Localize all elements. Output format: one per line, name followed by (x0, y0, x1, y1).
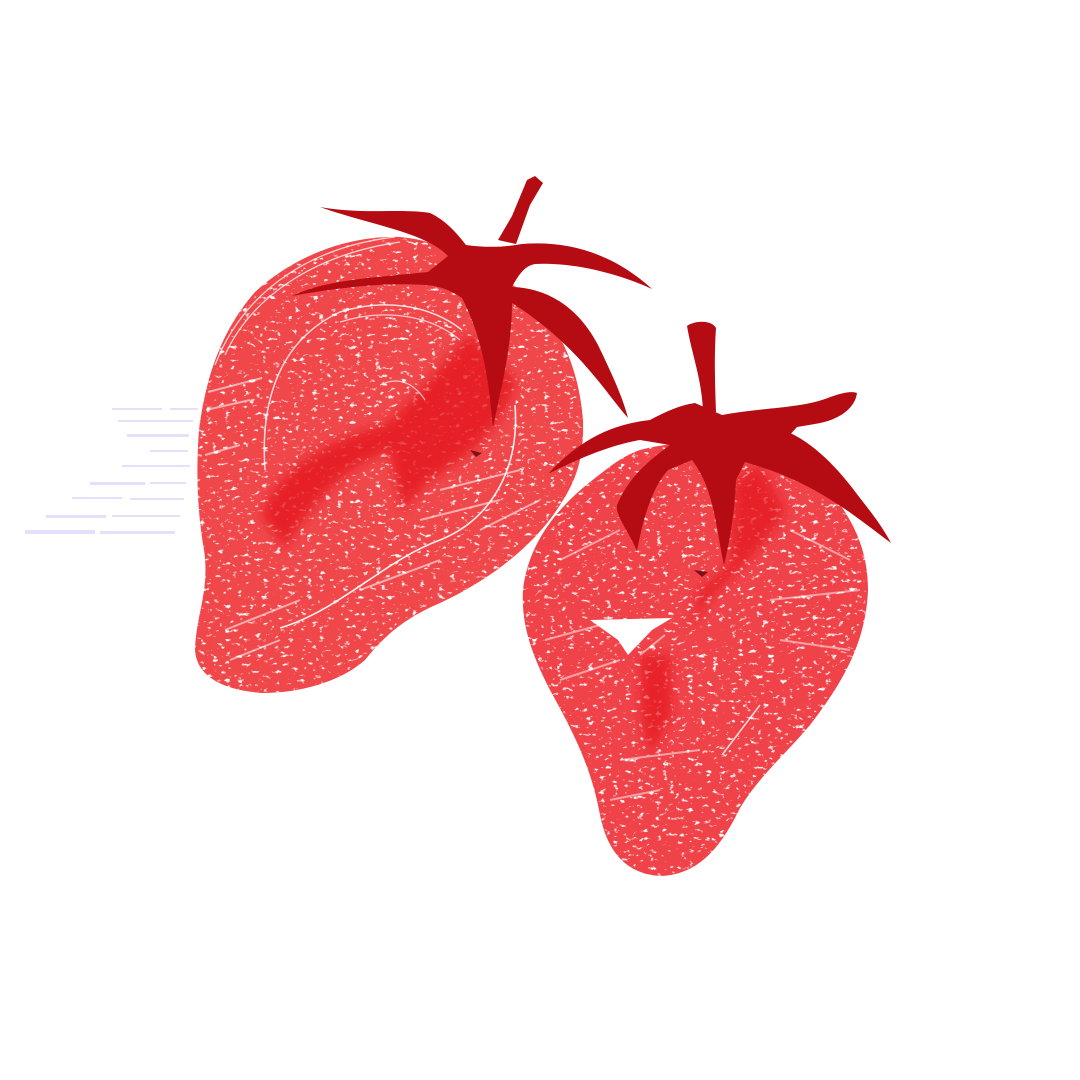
right calyx leaves (548, 392, 891, 565)
white torn gap (590, 618, 672, 655)
right calyx (548, 322, 891, 565)
right berry body (523, 442, 868, 876)
left calyx (292, 176, 652, 428)
left stem (498, 176, 543, 244)
illustration canvas (25, 176, 891, 876)
faint motion streaks left of the berry (25, 408, 198, 534)
strawberry: right (523, 442, 868, 876)
left berry leaf shadows (205, 237, 540, 660)
strawberry: left (195, 237, 583, 693)
right berry leaf shadows (545, 465, 860, 800)
left berry body (195, 237, 583, 693)
dark speck (470, 450, 482, 457)
left calyx leaves (292, 207, 652, 428)
right stem (687, 322, 716, 412)
